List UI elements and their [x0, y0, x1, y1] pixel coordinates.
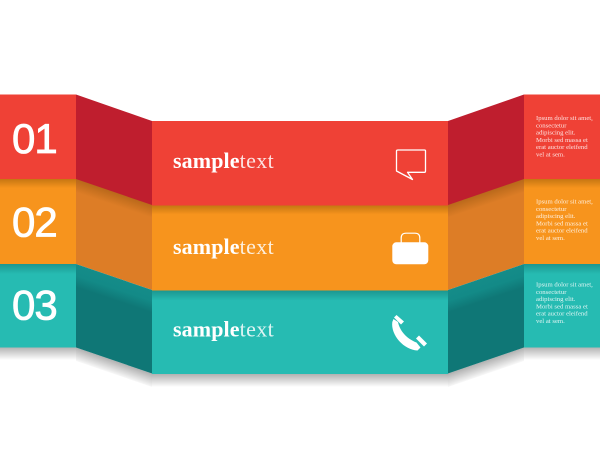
- text block 2: consectetur: [536, 206, 567, 213]
- center panel 3: [152, 290, 448, 374]
- right fold 1: [448, 94, 524, 206]
- text block 2: adipiscing elit.: [536, 213, 576, 220]
- text block 3: consectetur: [536, 289, 567, 296]
- left fold 3: [76, 264, 152, 374]
- right panel 2: [524, 179, 600, 264]
- number 03: 03: [12, 282, 57, 328]
- label 2: sampletext: [173, 234, 274, 259]
- shadow under band 2: [0, 264, 600, 300]
- label 1: sampletext: [173, 148, 274, 173]
- right panel 3: [524, 264, 600, 348]
- text block 1: Morbi sed massa et: [536, 137, 588, 144]
- icon: phone: [392, 315, 427, 350]
- right panel 1: [524, 94, 600, 180]
- left fold 1: [76, 94, 152, 206]
- shadow under band 1: [0, 179, 600, 214]
- text block 3: adipiscing elit.: [536, 296, 576, 303]
- left panel 03: [0, 264, 76, 348]
- text block 3: Morbi sed massa et: [536, 303, 588, 310]
- ground shadow: [0, 347, 600, 387]
- band 3: teal: [0, 264, 600, 374]
- label 3: sampletext: [173, 316, 274, 342]
- left fold 2: [76, 179, 152, 290]
- band 2: orange: [0, 179, 600, 290]
- text block 1: adipiscing elit.: [536, 130, 576, 137]
- left panel 02: [0, 179, 76, 264]
- text block 3: Ipsum dolor sit amet,: [536, 282, 593, 288]
- center panel 1: [152, 121, 448, 206]
- band 1: red: [0, 94, 600, 206]
- icon: speech bubble: [396, 150, 426, 180]
- text block 3: erat auctor eleifend: [536, 311, 588, 318]
- icon: bag: [392, 233, 428, 264]
- text block 3: vel at sem.: [536, 318, 565, 325]
- right fold 2: [448, 179, 524, 290]
- center panel 2: [152, 206, 448, 290]
- text block 2: vel at sem.: [536, 235, 565, 242]
- text block 1: vel at sem.: [536, 152, 565, 158]
- text block 1: consectetur: [536, 122, 567, 129]
- text block 1: Ipsum dolor sit amet,: [536, 115, 593, 122]
- text block 2: erat auctor eleifend: [536, 228, 588, 235]
- text block 1: erat auctor eleifend: [536, 144, 588, 151]
- left panel 01: [0, 94, 76, 180]
- number 01: 01: [12, 115, 57, 162]
- text block 2: Morbi sed massa et: [536, 220, 588, 227]
- text block 2: Ipsum dolor sit amet,: [536, 198, 593, 206]
- number 02: 02: [12, 198, 57, 246]
- right fold 3: [448, 264, 524, 374]
